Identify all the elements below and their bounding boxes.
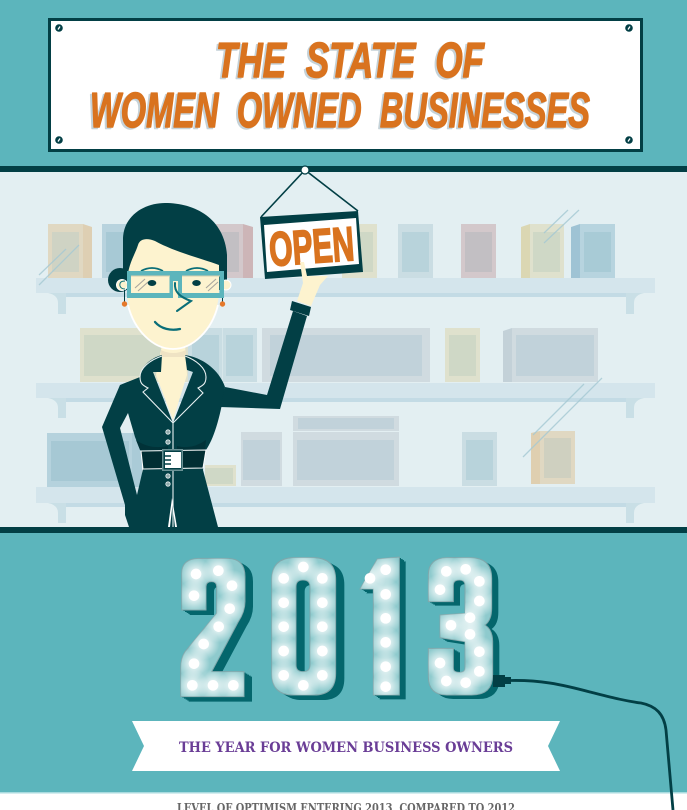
digit 0 [268,551,344,701]
face [127,239,219,349]
glasses [127,271,224,298]
title text [90,34,590,138]
digit 2 [176,555,253,702]
hand [297,262,328,306]
shelf books bottom row [47,416,575,487]
raised arm [220,311,307,409]
jacket [102,355,225,527]
nose [175,283,191,311]
neck shadow [161,350,186,357]
title banner [50,20,642,150]
shelf books middle row [80,328,598,382]
hair bun [108,268,132,292]
title shadow: THE STATE OF [214,36,483,90]
cuff [290,301,311,316]
belt buckle [162,449,183,471]
belt [141,450,206,469]
bust shadow [136,440,206,450]
shelf books top row [48,224,615,278]
lower white section [0,792,687,810]
eyebrows [141,268,208,271]
hair [123,203,227,290]
woman shopkeeper [102,166,363,527]
ribbon banner [132,721,560,771]
open sign text: OPEN [267,218,356,277]
nail [301,166,309,174]
banner screws [55,24,633,144]
title text: THE STATE OF [216,34,485,88]
digit 3 [424,553,499,699]
marquee 2013 [176,551,499,703]
title shadow [88,36,588,140]
shelves [36,278,655,523]
earrings [122,290,225,307]
digit 1 [359,556,406,700]
glass reflections [39,210,602,457]
jacket buttons [166,430,170,486]
open sign [260,211,363,279]
face outline [128,305,218,349]
jacket vent [168,498,177,527]
ribbon text: THE YEAR FOR WOMEN BUSINESS OWNERS [179,740,513,756]
storefront window panel [0,166,687,533]
ears [116,280,231,290]
sign hanger [261,170,358,217]
eyes [148,280,201,286]
power plug and cord [493,675,673,810]
lapels [140,356,206,527]
neck [156,345,187,420]
mouth [155,322,180,330]
